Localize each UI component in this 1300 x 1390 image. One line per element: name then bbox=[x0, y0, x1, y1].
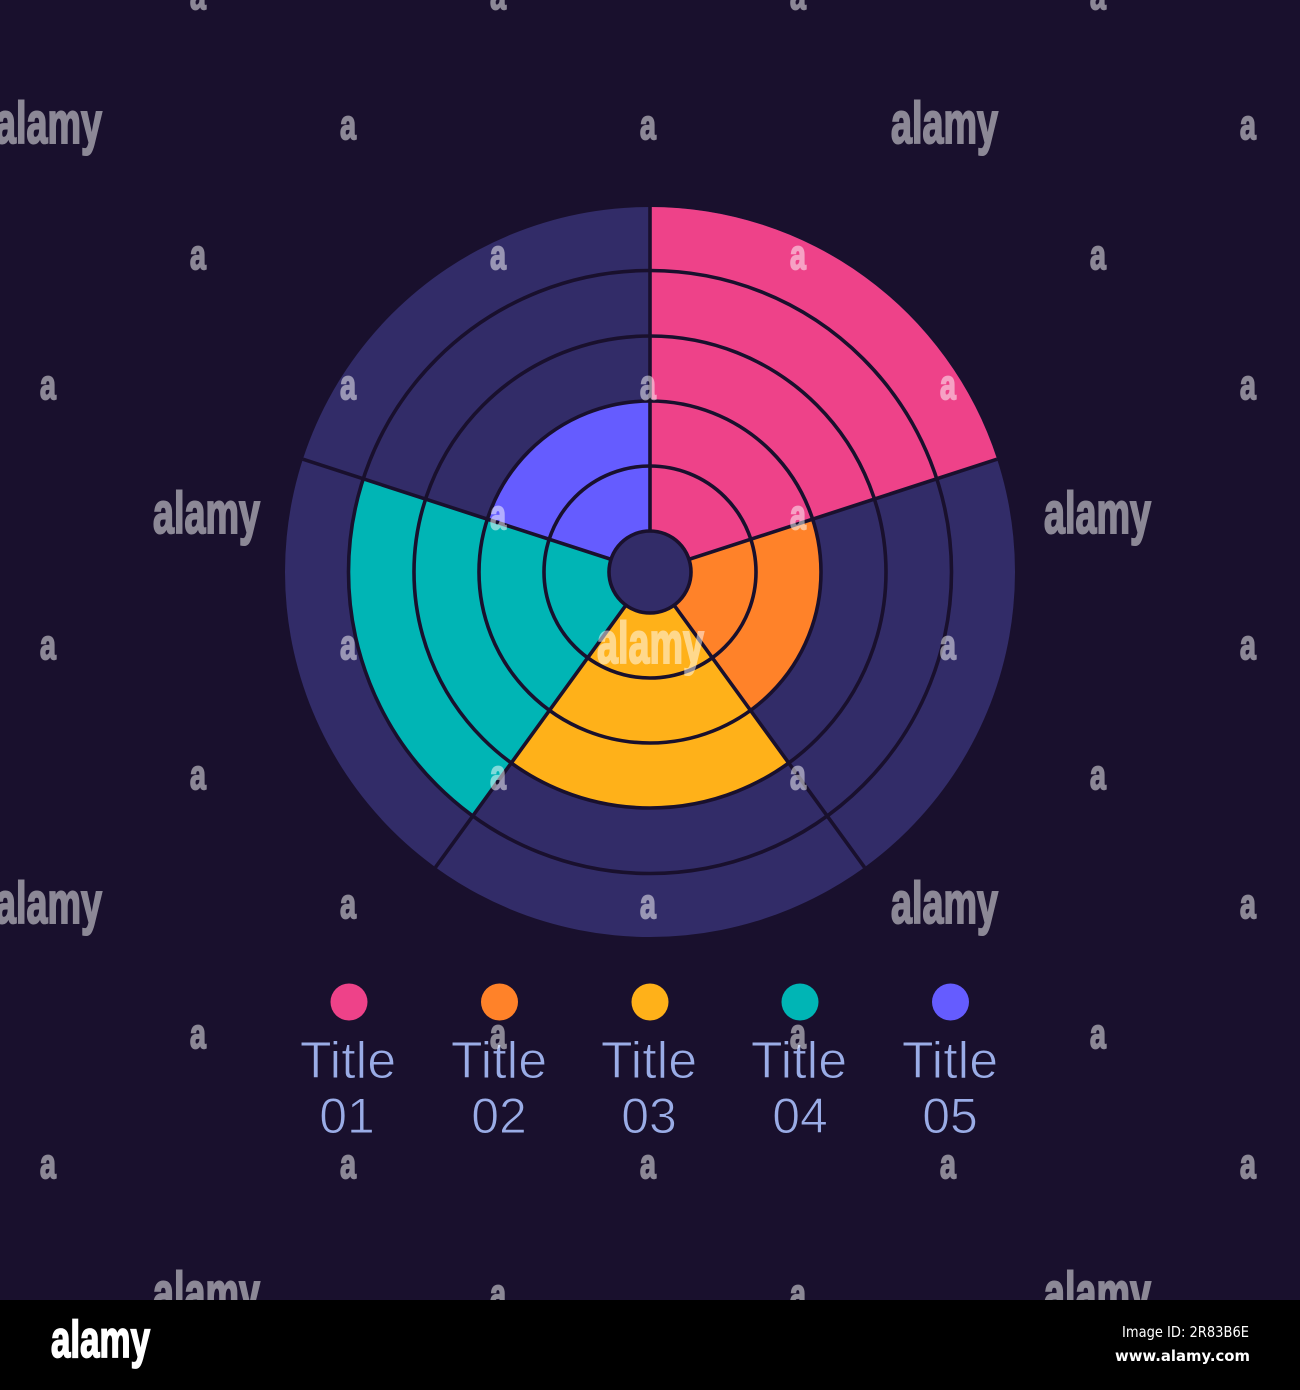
legend item 04: Title bbox=[751, 1032, 847, 1090]
image id: Image ID: 2R83B6E bbox=[1122, 1323, 1249, 1341]
watermark pattern: aa bbox=[490, 1269, 807, 1317]
sector: title 02 orange bbox=[650, 519, 821, 710]
watermark pattern: alamy bbox=[1044, 481, 1151, 546]
wheel base disc bbox=[285, 207, 1015, 937]
radial wheel chart bbox=[285, 207, 1015, 937]
legend item 02 bbox=[451, 984, 547, 1144]
watermark pattern: aaaa bbox=[40, 620, 1257, 668]
watermark pattern: aaaaa bbox=[40, 1139, 1257, 1187]
legend item 03: 03 bbox=[621, 1088, 677, 1144]
legend item 05: 05 bbox=[922, 1088, 978, 1144]
legend item 05: Title bbox=[902, 1032, 998, 1090]
sector: title 01 pink bbox=[650, 207, 997, 572]
watermark pattern: aaa bbox=[340, 879, 1257, 927]
legend item 01: Title bbox=[300, 1032, 396, 1090]
legend item 05 bbox=[902, 984, 998, 1144]
watermark pattern: aaa bbox=[340, 100, 1257, 148]
watermark pattern: aaaa bbox=[190, 230, 1107, 278]
footer bar bbox=[0, 1300, 1300, 1390]
legend item 02: 02 bbox=[471, 1088, 527, 1144]
legend bbox=[300, 984, 998, 1144]
wheel hub bbox=[609, 531, 691, 613]
watermark pattern: aaaa bbox=[190, 1009, 1107, 1057]
watermark pattern: alamy bbox=[1044, 1261, 1151, 1326]
legend item 03: Title bbox=[601, 1032, 697, 1090]
legend item 03 bbox=[601, 984, 697, 1144]
footer logo: alamy bbox=[51, 1311, 150, 1369]
website: www.alamy.com bbox=[1115, 1347, 1250, 1365]
watermark pattern: aaaa bbox=[190, 750, 1107, 798]
watermark pattern: aa bbox=[490, 490, 807, 538]
watermark pattern: alamy bbox=[153, 481, 260, 546]
watermark pattern: alamy bbox=[153, 1261, 260, 1326]
legend item 01: 01 bbox=[319, 1088, 375, 1144]
legend item 04: 04 bbox=[772, 1088, 828, 1144]
legend item 04 bbox=[751, 984, 847, 1144]
watermark pattern: alamy bbox=[891, 91, 998, 156]
watermark pattern: aaaaa bbox=[40, 360, 1257, 408]
watermark pattern: alamy bbox=[891, 871, 998, 936]
sector: title 04 teal bbox=[349, 479, 650, 816]
legend item 01 bbox=[300, 984, 396, 1144]
sector: title 05 violet bbox=[487, 401, 650, 572]
watermark pattern: alamy bbox=[597, 611, 704, 676]
legend item 02: Title bbox=[451, 1032, 547, 1090]
sector: title 03 yellow bbox=[511, 572, 789, 808]
